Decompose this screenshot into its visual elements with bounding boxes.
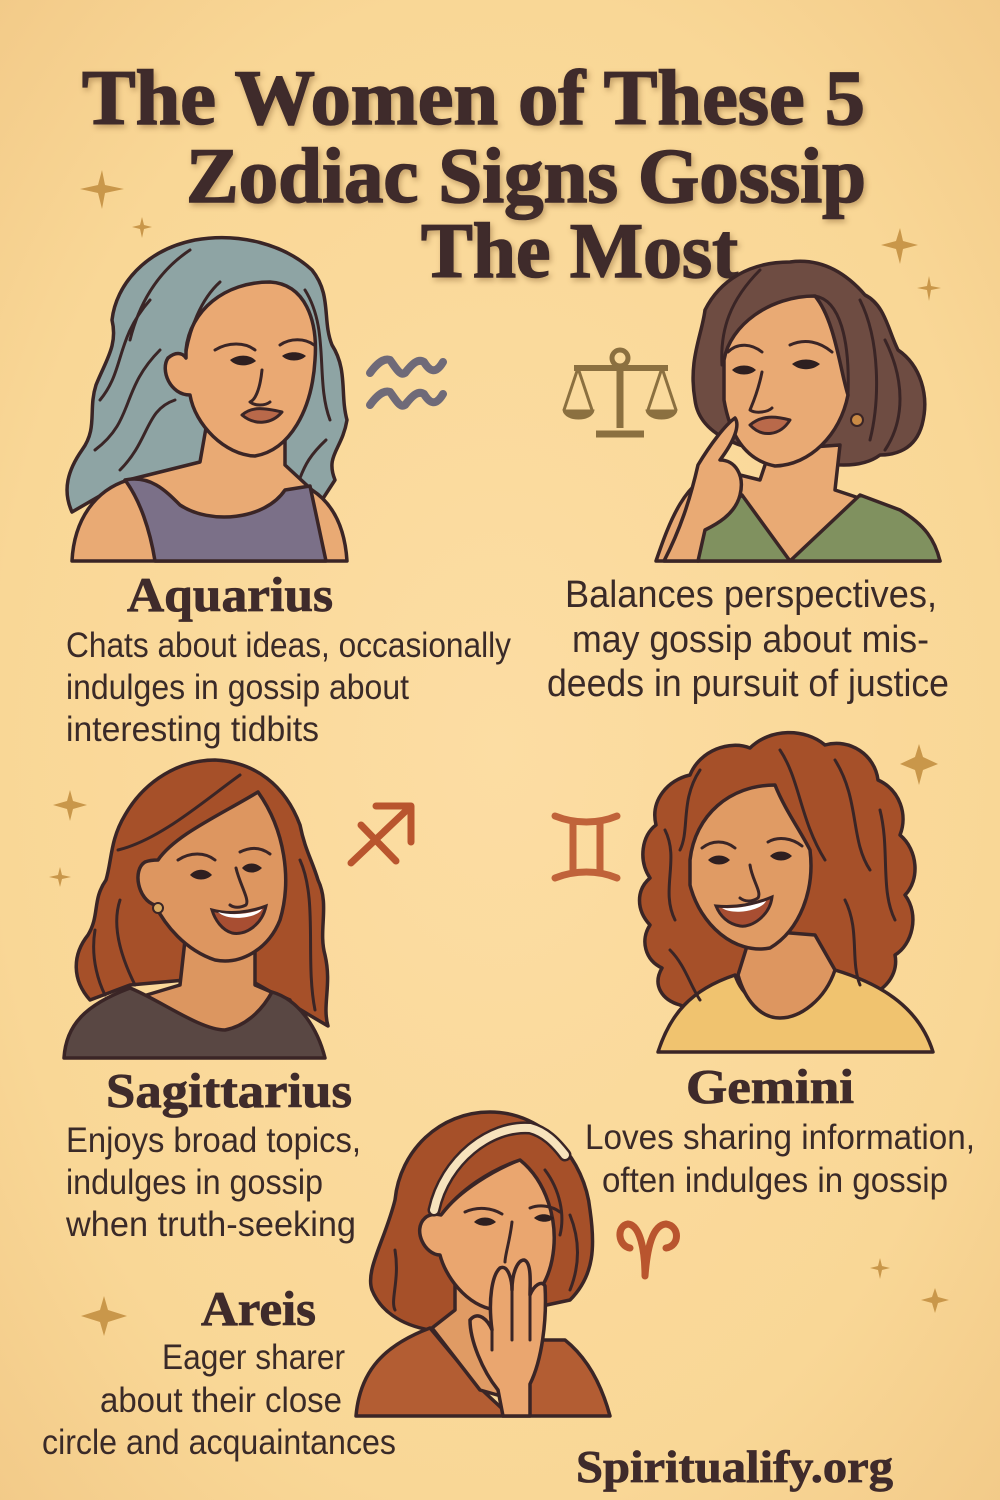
decorative sparkles — [49, 170, 949, 1336]
text: Aquarius description: interesting tidbits — [66, 710, 319, 749]
portrait: Sagittarius woman — [64, 760, 328, 1058]
icon: Aries symbol — [620, 1224, 676, 1276]
text: Sagittarius description: Enjoys broad topics, — [66, 1121, 361, 1160]
hair strands — [95, 250, 330, 478]
earring — [153, 903, 163, 913]
neck — [432, 1280, 530, 1400]
portrait: Aries woman — [356, 1112, 610, 1416]
text: Sagittarius description — [65, 1121, 361, 1244]
text: Sagittarius description: when truth-seeking — [65, 1205, 356, 1244]
label: Gemini: Gemini — [686, 1059, 854, 1114]
text: Areis description: circle and acquaintances — [42, 1423, 396, 1462]
shoulders and neck — [72, 405, 347, 561]
hair strands — [665, 750, 895, 1000]
facial features — [702, 839, 802, 901]
portrait: Aquarius woman — [67, 238, 347, 561]
dark top — [64, 988, 325, 1058]
text: Sagittarius description: indulges in gossip — [66, 1163, 323, 1202]
text: Libra description — [547, 574, 949, 705]
text: Aquarius description: Chats about ideas, occasionally — [66, 626, 511, 665]
text: Gemini description — [585, 1118, 975, 1200]
hand — [664, 418, 741, 561]
face — [138, 792, 286, 961]
facial features — [178, 848, 270, 907]
green top — [698, 495, 940, 561]
neck — [738, 930, 835, 1018]
earring — [851, 414, 863, 426]
text: Libra description: deeds in pursuit of justice — [547, 663, 949, 705]
text: Gemini description: often indulges in gossip — [602, 1161, 948, 1200]
body — [656, 445, 940, 561]
portrait: Libra woman — [656, 261, 940, 561]
footer: source: Spiritualify.org — [576, 1441, 893, 1492]
facial features — [465, 1206, 560, 1262]
text: Gemini description: Loves sharing information, — [585, 1118, 975, 1157]
label: Areis: Areis — [201, 1281, 316, 1336]
face — [165, 282, 315, 456]
label: Aquarius: Aquarius — [127, 567, 333, 622]
text: Aquarius description: indulges in gossip about — [66, 668, 409, 707]
body — [658, 970, 933, 1052]
icon: Aquarius symbol — [370, 360, 443, 406]
body — [356, 1328, 610, 1416]
title — [82, 54, 866, 294]
hair — [693, 261, 925, 465]
text: Libra description: Balances perspectives, — [565, 574, 937, 616]
title: The Women of These 5 — [82, 54, 865, 141]
title: Zodiac Signs Gossip — [186, 132, 866, 219]
hair strands — [394, 1160, 578, 1310]
icon: Gemini symbol — [555, 816, 617, 878]
hair — [371, 1112, 593, 1330]
hair — [640, 733, 915, 1017]
text: Areis description: Eager sharer — [162, 1338, 345, 1377]
facial features — [728, 341, 832, 412]
icon: Sagittarius symbol — [351, 806, 411, 863]
tank top — [125, 479, 326, 561]
face — [690, 785, 811, 949]
hair — [76, 760, 328, 1026]
hair strands — [94, 775, 315, 1010]
face — [724, 296, 848, 466]
hair — [67, 238, 347, 512]
headband — [434, 1128, 565, 1210]
portrait: Gemini woman — [640, 733, 933, 1052]
text: Areis description: about their close — [100, 1381, 342, 1420]
label: Sagittarius: Sagittarius — [106, 1063, 352, 1118]
text: Areis description — [42, 1338, 396, 1462]
body — [130, 940, 300, 1040]
face — [420, 1160, 554, 1311]
title: The Most — [421, 207, 738, 294]
text: Aquarius description — [66, 626, 511, 749]
text: Libra description: may gossip about mis- — [572, 619, 929, 661]
facial features — [215, 340, 314, 405]
hand over mouth — [470, 1260, 545, 1416]
hair strands — [722, 270, 900, 450]
icon: Libra scales — [563, 350, 677, 434]
